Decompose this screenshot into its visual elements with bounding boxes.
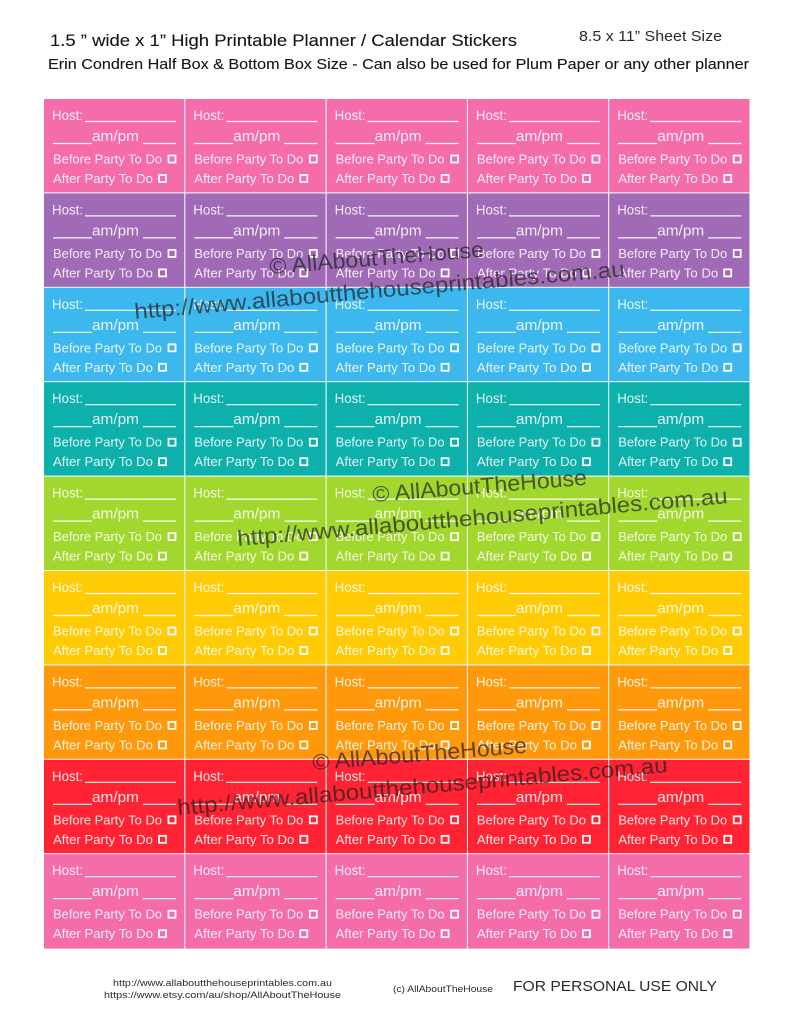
sticker 6-1: Before Party To Do bbox=[53, 624, 162, 638]
sticker 3-3 bbox=[327, 288, 467, 381]
sticker 1-4: Host: bbox=[476, 108, 507, 123]
sticker 5-4: am/pm bbox=[516, 507, 563, 523]
sticker 4-1: Host: bbox=[52, 391, 83, 406]
sticker 7-2: After Party To Do bbox=[194, 738, 294, 752]
sticker 9-5: After Party To Do bbox=[618, 927, 718, 941]
sticker 5-5: After Party To Do bbox=[618, 550, 718, 564]
sticker 7-5: After Party To Do bbox=[618, 738, 718, 752]
sticker 2-2 bbox=[185, 193, 326, 287]
sticker 8-1: Host: bbox=[52, 769, 83, 784]
sticker 6-3: Before Party To Do bbox=[336, 624, 445, 638]
sticker 6-4: Host: bbox=[476, 580, 507, 595]
title: 1.5 ” wide x 1” High Printable Planner / Calendar Stickers bbox=[50, 31, 517, 50]
sticker 7-5: Before Party To Do bbox=[618, 719, 727, 733]
sticker 3-4: Host: bbox=[476, 297, 507, 312]
sticker 4-4 bbox=[468, 382, 608, 476]
sticker 7-2: am/pm bbox=[233, 695, 280, 711]
sticker 8-4: Before Party To Do bbox=[477, 813, 586, 827]
sticker 9-4: am/pm bbox=[516, 884, 563, 900]
sheet size note: 8.5 x 11” Sheet Size bbox=[579, 28, 722, 45]
sticker 2-3: After Party To Do bbox=[336, 266, 436, 280]
watermark 3: http://www.allaboutthehouseprintables.com.au bbox=[176, 752, 669, 820]
sticker 5-4: Before Party To Do bbox=[477, 530, 586, 544]
sticker 7-4: Before Party To Do bbox=[477, 719, 586, 733]
sticker 8-3: Host: bbox=[335, 769, 366, 784]
sticker 6-5: After Party To Do bbox=[618, 644, 718, 658]
sticker 8-5: After Party To Do bbox=[618, 833, 718, 847]
row 9: pink stickers bbox=[44, 854, 750, 949]
sticker 7-5: am/pm bbox=[657, 695, 704, 711]
sticker 8-2: am/pm bbox=[233, 790, 280, 806]
sticker 8-2 bbox=[185, 760, 326, 853]
sticker 7-1: After Party To Do bbox=[53, 738, 153, 752]
watermark 1 bbox=[133, 237, 626, 324]
sticker 8-2: After Party To Do bbox=[194, 833, 294, 847]
sticker 6-5 bbox=[609, 571, 750, 664]
sticker 7-2: Before Party To Do bbox=[194, 719, 303, 733]
sticker 6-2 bbox=[185, 571, 326, 664]
sticker 5-1: After Party To Do bbox=[53, 550, 153, 564]
sticker 2-3 bbox=[327, 193, 467, 287]
sticker 1-4 bbox=[468, 99, 608, 192]
sticker 3-1: Before Party To Do bbox=[53, 341, 162, 355]
sticker 1-3: am/pm bbox=[375, 129, 422, 145]
sticker 6-5: am/pm bbox=[657, 601, 704, 617]
sticker 3-3: Host: bbox=[335, 297, 366, 312]
sticker 5-5: Before Party To Do bbox=[618, 530, 727, 544]
sticker 7-2: Host: bbox=[193, 674, 224, 689]
sticker 9-4: After Party To Do bbox=[477, 927, 577, 941]
sticker 6-1: am/pm bbox=[92, 601, 139, 617]
sticker 4-4: Host: bbox=[476, 391, 507, 406]
sticker 9-3: After Party To Do bbox=[336, 927, 436, 941]
sticker 4-3 bbox=[327, 382, 467, 476]
sticker 5-3 bbox=[327, 477, 467, 570]
sticker 4-1 bbox=[44, 382, 184, 476]
sticker 1-2: After Party To Do bbox=[194, 172, 294, 186]
sticker 4-3: After Party To Do bbox=[336, 455, 436, 469]
sticker 9-1: Host: bbox=[52, 863, 83, 878]
sticker 6-4: Before Party To Do bbox=[477, 624, 586, 638]
sticker 5-5: Host: bbox=[617, 486, 648, 501]
footer website links: https://www.etsy.com/au/shop/AllAboutTheHouse bbox=[104, 990, 341, 1001]
sticker 1-3: Host: bbox=[335, 108, 366, 123]
sticker 3-2: After Party To Do bbox=[194, 361, 294, 375]
sticker 2-4: After Party To Do bbox=[477, 266, 577, 280]
sticker 5-1: Before Party To Do bbox=[53, 530, 162, 544]
sticker 7-3: Before Party To Do bbox=[336, 719, 445, 733]
footer website links: http://www.allaboutthehouseprintables.com.au bbox=[113, 978, 332, 989]
row 5: green stickers bbox=[44, 477, 750, 570]
row 8: red stickers bbox=[44, 760, 750, 853]
sticker 1-5: Before Party To Do bbox=[618, 152, 727, 166]
sticker 3-3: am/pm bbox=[375, 318, 422, 334]
sticker 8-5: Before Party To Do bbox=[618, 813, 727, 827]
watermark 3: © AllAboutTheHouse bbox=[311, 733, 528, 775]
sticker 8-2: Before Party To Do bbox=[194, 813, 303, 827]
sticker 7-5 bbox=[609, 665, 750, 759]
sticker 4-2: Before Party To Do bbox=[194, 436, 303, 450]
sticker 1-1: Before Party To Do bbox=[53, 152, 162, 166]
sticker 5-3: Before Party To Do bbox=[336, 530, 445, 544]
sticker 2-3: Host: bbox=[335, 202, 366, 217]
sticker 9-1: Before Party To Do bbox=[53, 908, 162, 922]
sticker 9-4: Host: bbox=[476, 863, 507, 878]
sticker 2-4: am/pm bbox=[516, 223, 563, 239]
watermark 2: © AllAboutTheHouse bbox=[371, 465, 588, 507]
sticker 3-1: Host: bbox=[52, 297, 83, 312]
sticker 9-4: Before Party To Do bbox=[477, 908, 586, 922]
sticker 7-3: Host: bbox=[335, 674, 366, 689]
sticker 2-2: am/pm bbox=[233, 223, 280, 239]
sticker 2-4: Host: bbox=[476, 202, 507, 217]
sticker 8-3: After Party To Do bbox=[336, 833, 436, 847]
sticker 4-5: Host: bbox=[617, 391, 648, 406]
sticker 4-2: Host: bbox=[193, 391, 224, 406]
sticker 4-3: Before Party To Do bbox=[336, 436, 445, 450]
watermark 1: © AllAboutTheHouse bbox=[268, 237, 485, 279]
watermark 2 bbox=[236, 465, 729, 551]
sticker 7-2 bbox=[185, 665, 326, 759]
sticker 1-4: After Party To Do bbox=[477, 172, 577, 186]
sticker 9-5: Before Party To Do bbox=[618, 908, 727, 922]
sticker 6-4 bbox=[468, 571, 608, 664]
sticker 5-2: Host: bbox=[193, 486, 224, 501]
sticker 9-4 bbox=[468, 854, 608, 949]
sticker 5-4: After Party To Do bbox=[477, 550, 577, 564]
subtitle: Erin Condren Half Box & Bottom Box Size - Can also be used for Plum Paper or any other planner bbox=[48, 56, 749, 73]
footer personal use notice: FOR PERSONAL USE ONLY bbox=[513, 979, 717, 995]
sticker 6-1: After Party To Do bbox=[53, 644, 153, 658]
sticker 4-1: am/pm bbox=[92, 412, 139, 428]
sticker 2-4 bbox=[468, 193, 608, 287]
sticker 9-3 bbox=[327, 854, 467, 949]
sticker 4-4: Before Party To Do bbox=[477, 436, 586, 450]
sticker 5-1 bbox=[44, 477, 184, 570]
sticker 4-4: am/pm bbox=[516, 412, 563, 428]
sticker 5-1: am/pm bbox=[92, 507, 139, 523]
sticker 3-1: am/pm bbox=[92, 318, 139, 334]
row 6: yellow stickers bbox=[44, 571, 750, 664]
sticker 1-5: am/pm bbox=[657, 129, 704, 145]
sticker 7-3: After Party To Do bbox=[336, 738, 436, 752]
row 4: teal stickers bbox=[44, 382, 750, 476]
footer copyright: (c) AllAboutTheHouse bbox=[393, 984, 493, 995]
sticker 8-4: Host: bbox=[476, 769, 507, 784]
sticker 7-4: Host: bbox=[476, 674, 507, 689]
sticker 8-1: Before Party To Do bbox=[53, 813, 162, 827]
sticker 6-1: Host: bbox=[52, 580, 83, 595]
sticker 6-4: After Party To Do bbox=[477, 644, 577, 658]
sticker 5-5 bbox=[609, 477, 750, 570]
sticker 2-5: Before Party To Do bbox=[618, 247, 727, 261]
sticker 9-2: After Party To Do bbox=[194, 927, 294, 941]
sticker 4-5 bbox=[609, 382, 750, 476]
sticker 9-2: Before Party To Do bbox=[194, 908, 303, 922]
sticker 1-2: Before Party To Do bbox=[194, 152, 303, 166]
sticker 9-1 bbox=[44, 854, 184, 949]
sticker 7-3: am/pm bbox=[375, 695, 422, 711]
sticker 1-1: Host: bbox=[52, 108, 83, 123]
sticker 6-5: Before Party To Do bbox=[618, 624, 727, 638]
sticker 1-1 bbox=[44, 99, 184, 192]
sticker 3-4: am/pm bbox=[516, 318, 563, 334]
sticker 5-5: am/pm bbox=[657, 507, 704, 523]
sticker 3-2: Host: bbox=[193, 297, 224, 312]
sticker 1-3: Before Party To Do bbox=[336, 152, 445, 166]
watermark 3 bbox=[176, 733, 669, 820]
sticker 4-5: Before Party To Do bbox=[618, 436, 727, 450]
sticker 1-4: am/pm bbox=[516, 129, 563, 145]
sticker 2-5: am/pm bbox=[657, 223, 704, 239]
sticker 7-1: Host: bbox=[52, 674, 83, 689]
sticker 5-3: After Party To Do bbox=[336, 550, 436, 564]
sticker 9-3: Before Party To Do bbox=[336, 908, 445, 922]
sticker 9-2 bbox=[185, 854, 326, 949]
sticker 6-1 bbox=[44, 571, 184, 664]
watermark 2: http://www.allaboutthehouseprintables.com.au bbox=[236, 483, 729, 551]
row 7: orange stickers bbox=[44, 665, 750, 759]
sticker 2-1: After Party To Do bbox=[53, 266, 153, 280]
sticker 2-1: am/pm bbox=[92, 223, 139, 239]
sticker 9-1: am/pm bbox=[92, 884, 139, 900]
sticker 6-5: Host: bbox=[617, 580, 648, 595]
sticker 8-2: Host: bbox=[193, 769, 224, 784]
row 1: pink stickers bbox=[44, 99, 750, 192]
sticker 1-1: am/pm bbox=[92, 129, 139, 145]
sticker 9-1: After Party To Do bbox=[53, 927, 153, 941]
sticker 2-1: Before Party To Do bbox=[53, 247, 162, 261]
sticker 2-4: Before Party To Do bbox=[477, 247, 586, 261]
sticker 7-1: Before Party To Do bbox=[53, 719, 162, 733]
sticker 8-1: am/pm bbox=[92, 790, 139, 806]
sticker 4-2 bbox=[185, 382, 326, 476]
sticker 9-2: Host: bbox=[193, 863, 224, 878]
sticker 6-3 bbox=[327, 571, 467, 664]
sticker 4-5: After Party To Do bbox=[618, 455, 718, 469]
sticker 8-3: Before Party To Do bbox=[336, 813, 445, 827]
sticker 9-3: am/pm bbox=[375, 884, 422, 900]
sticker 8-4 bbox=[468, 760, 608, 853]
sticker 3-3: Before Party To Do bbox=[336, 341, 445, 355]
sticker 4-4: After Party To Do bbox=[477, 455, 577, 469]
sticker 5-2: Before Party To Do bbox=[194, 530, 303, 544]
sticker 9-5 bbox=[609, 854, 750, 949]
sticker 5-4: Host: bbox=[476, 486, 507, 501]
sticker 5-4 bbox=[468, 477, 608, 570]
sticker 1-1: After Party To Do bbox=[53, 172, 153, 186]
sticker 3-2: am/pm bbox=[233, 318, 280, 334]
sticker 7-1: am/pm bbox=[92, 695, 139, 711]
footer website links bbox=[104, 978, 341, 1001]
sticker 1-4: Before Party To Do bbox=[477, 152, 586, 166]
sticker 3-5 bbox=[609, 288, 750, 381]
sticker 3-4: Before Party To Do bbox=[477, 341, 586, 355]
sticker 6-2: Before Party To Do bbox=[194, 624, 303, 638]
watermark 1: http://www.allaboutthehouseprintables.com.au bbox=[133, 256, 626, 324]
sticker 5-1: Host: bbox=[52, 486, 83, 501]
sticker 1-2: Host: bbox=[193, 108, 224, 123]
sticker 2-5: Host: bbox=[617, 202, 648, 217]
sticker 3-1: After Party To Do bbox=[53, 361, 153, 375]
sticker 2-3: Before Party To Do bbox=[336, 247, 445, 261]
sticker 2-2: After Party To Do bbox=[194, 266, 294, 280]
sticker 3-4 bbox=[468, 288, 608, 381]
sticker 5-3: am/pm bbox=[375, 507, 422, 523]
sticker 1-3 bbox=[327, 99, 467, 192]
sticker 7-4: After Party To Do bbox=[477, 738, 577, 752]
sticker 3-3: After Party To Do bbox=[336, 361, 436, 375]
sticker 3-5: am/pm bbox=[657, 318, 704, 334]
sticker 3-1 bbox=[44, 288, 184, 381]
sticker 3-5: After Party To Do bbox=[618, 361, 718, 375]
sticker 1-5: Host: bbox=[617, 108, 648, 123]
sticker 6-3: Host: bbox=[335, 580, 366, 595]
sticker 2-3: am/pm bbox=[375, 223, 422, 239]
sticker 3-5: Before Party To Do bbox=[618, 341, 727, 355]
sticker 8-4: am/pm bbox=[516, 790, 563, 806]
sticker 8-5: am/pm bbox=[657, 790, 704, 806]
sticker 4-3: am/pm bbox=[375, 412, 422, 428]
sticker 6-3: am/pm bbox=[375, 601, 422, 617]
sticker 3-5: Host: bbox=[617, 297, 648, 312]
sticker 3-2: Before Party To Do bbox=[194, 341, 303, 355]
sticker 1-5 bbox=[609, 99, 750, 192]
sticker 8-5 bbox=[609, 760, 750, 853]
sticker 2-5 bbox=[609, 193, 750, 287]
row 2: purple stickers bbox=[44, 193, 750, 287]
sticker 9-5: Host: bbox=[617, 863, 648, 878]
sticker 1-3: After Party To Do bbox=[336, 172, 436, 186]
sticker 8-4: After Party To Do bbox=[477, 833, 577, 847]
sticker 4-1: After Party To Do bbox=[53, 455, 153, 469]
sticker 6-2: am/pm bbox=[233, 601, 280, 617]
sticker 8-1 bbox=[44, 760, 184, 853]
sticker 5-3: Host: bbox=[335, 486, 366, 501]
sticker 7-4: am/pm bbox=[516, 695, 563, 711]
sticker 4-5: am/pm bbox=[657, 412, 704, 428]
sticker 7-5: Host: bbox=[617, 674, 648, 689]
sticker 2-2: Host: bbox=[193, 202, 224, 217]
sticker 1-2: am/pm bbox=[233, 129, 280, 145]
sticker 6-2: Host: bbox=[193, 580, 224, 595]
sticker 4-1: Before Party To Do bbox=[53, 436, 162, 450]
sticker 9-5: am/pm bbox=[657, 884, 704, 900]
sticker 8-3: am/pm bbox=[375, 790, 422, 806]
sticker 4-2: am/pm bbox=[233, 412, 280, 428]
sticker 7-3 bbox=[327, 665, 467, 759]
sticker 8-3 bbox=[327, 760, 467, 853]
sticker 2-1 bbox=[44, 193, 184, 287]
sticker 1-5: After Party To Do bbox=[618, 172, 718, 186]
sticker 8-5: Host: bbox=[617, 769, 648, 784]
sticker 2-2: Before Party To Do bbox=[194, 247, 303, 261]
sticker 4-2: After Party To Do bbox=[194, 455, 294, 469]
sticker 5-2: am/pm bbox=[233, 507, 280, 523]
row 3: blue stickers bbox=[44, 288, 750, 381]
sticker 6-4: am/pm bbox=[516, 601, 563, 617]
sticker 6-3: After Party To Do bbox=[336, 644, 436, 658]
sticker 3-4: After Party To Do bbox=[477, 361, 577, 375]
sticker 3-2 bbox=[185, 288, 326, 381]
sticker 4-3: Host: bbox=[335, 391, 366, 406]
sticker 9-2: am/pm bbox=[233, 884, 280, 900]
sticker 1-2 bbox=[185, 99, 326, 192]
sticker 9-3: Host: bbox=[335, 863, 366, 878]
sticker 2-1: Host: bbox=[52, 202, 83, 217]
sticker 6-2: After Party To Do bbox=[194, 644, 294, 658]
sticker 7-1 bbox=[44, 665, 184, 759]
sticker 7-4 bbox=[468, 665, 608, 759]
sticker 8-1: After Party To Do bbox=[53, 833, 153, 847]
sticker 2-5: After Party To Do bbox=[618, 266, 718, 280]
sticker 5-2 bbox=[185, 477, 326, 570]
sticker 5-2: After Party To Do bbox=[194, 550, 294, 564]
